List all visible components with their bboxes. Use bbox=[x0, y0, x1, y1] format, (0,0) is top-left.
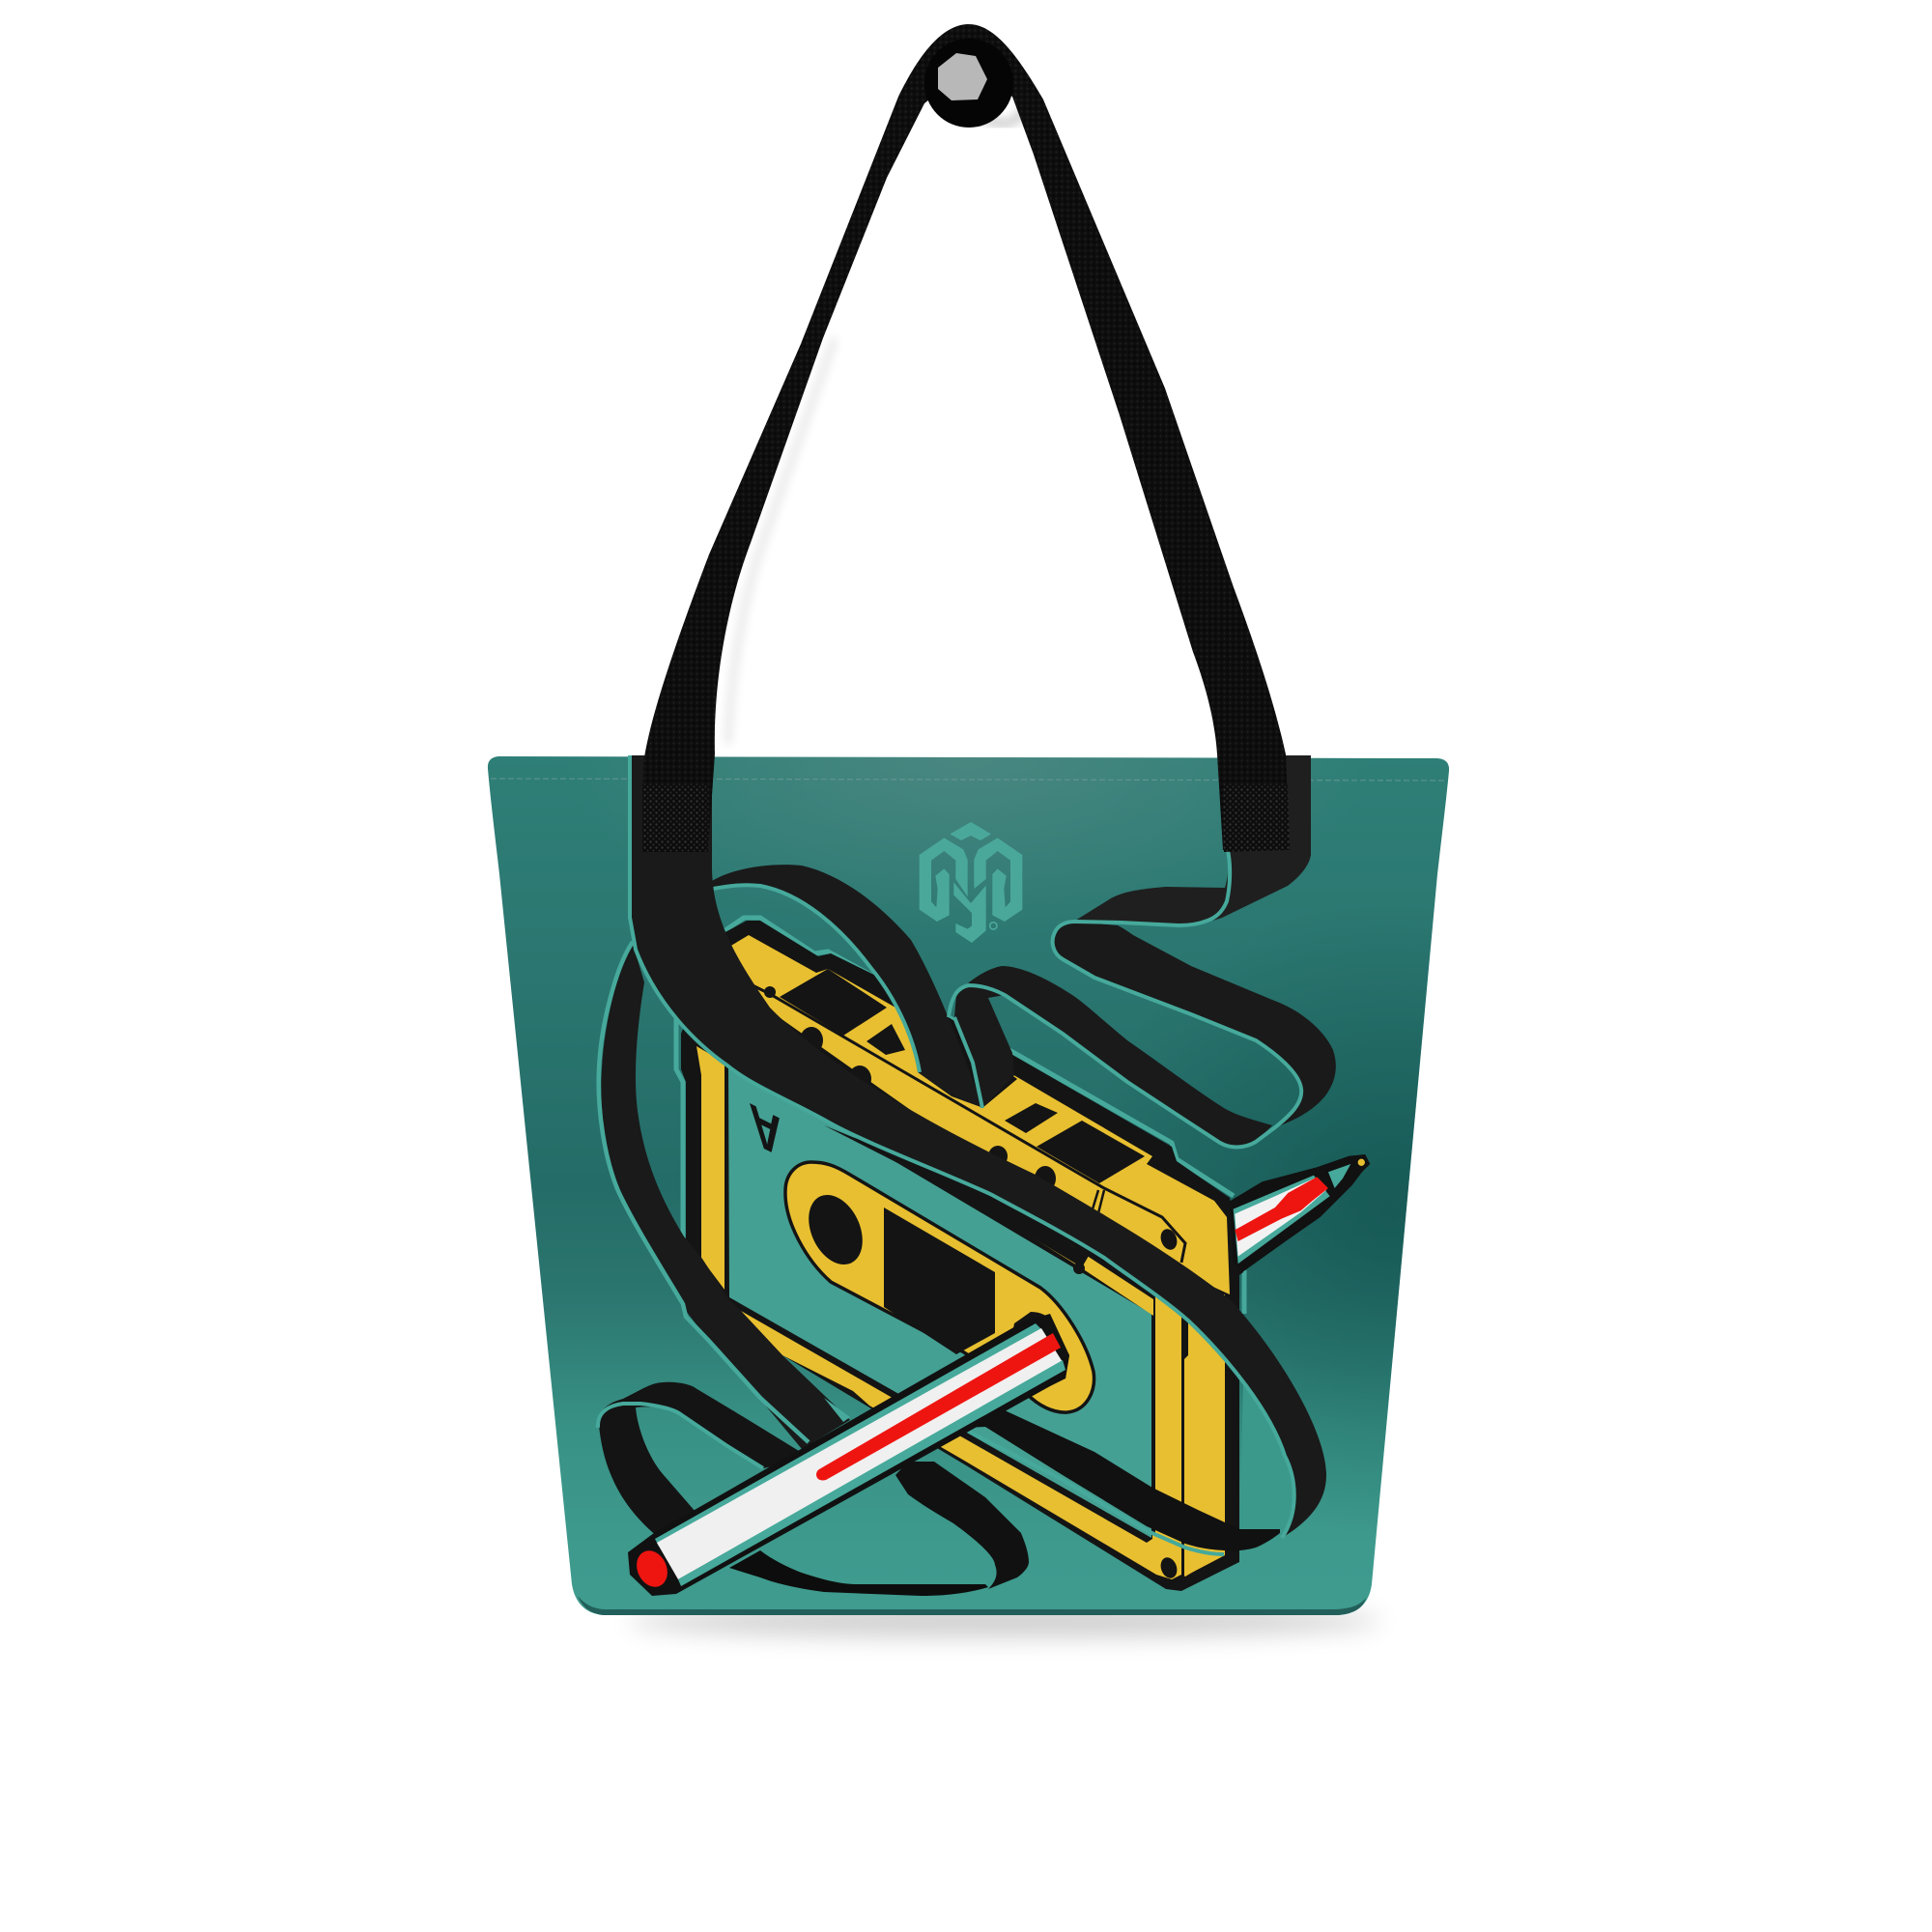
ribbon: lower loop bbox=[598, 1382, 811, 1536]
ribbon: top arch bbox=[712, 865, 983, 1108]
logo bbox=[920, 822, 1022, 943]
hanging peg bbox=[924, 39, 1013, 128]
ribbon: strap end and top band bbox=[1075, 755, 1311, 925]
ribbon: right loop band bbox=[1052, 922, 1336, 1127]
bottom yellow bar bbox=[741, 1311, 1181, 1579]
cassette side letter: A bbox=[748, 1091, 784, 1172]
bag drop shadow bbox=[628, 1605, 1381, 1636]
black wedge under tape bbox=[824, 1125, 1089, 1267]
cassette outline bbox=[681, 921, 1243, 1591]
pen cap bbox=[631, 1546, 673, 1592]
ribbon: bottom sweep bbox=[729, 1550, 988, 1596]
left yellow bar bbox=[696, 1046, 724, 1290]
yellow sliver under tape bbox=[927, 1177, 1153, 1316]
pen barrel bbox=[628, 1314, 1069, 1596]
bag body bbox=[488, 756, 1449, 1615]
top strip bbox=[729, 935, 1230, 1294]
ribbon: right hook bbox=[895, 1462, 1029, 1589]
ribbon: bottom tail bbox=[927, 1391, 1280, 1554]
ribbon: main sweep bbox=[630, 755, 1326, 1538]
right strap tab bbox=[1223, 784, 1290, 852]
cassette mint outline bbox=[676, 918, 1244, 1314]
ribbon: mint contour bbox=[949, 850, 1301, 1147]
right yellow bars bbox=[1155, 1294, 1181, 1546]
cassette bbox=[676, 918, 1244, 1591]
pen tip bbox=[1230, 1154, 1370, 1272]
handle shadows bbox=[728, 101, 1026, 744]
ribbon: left sweep bbox=[599, 942, 850, 1449]
ribbon: return band bbox=[954, 966, 1272, 1148]
window frame bbox=[785, 1162, 1094, 1412]
cassette face bbox=[728, 1063, 1151, 1538]
handles bbox=[642, 24, 1290, 850]
left strap tab bbox=[642, 784, 708, 852]
curl interior fill bbox=[1239, 1384, 1294, 1536]
